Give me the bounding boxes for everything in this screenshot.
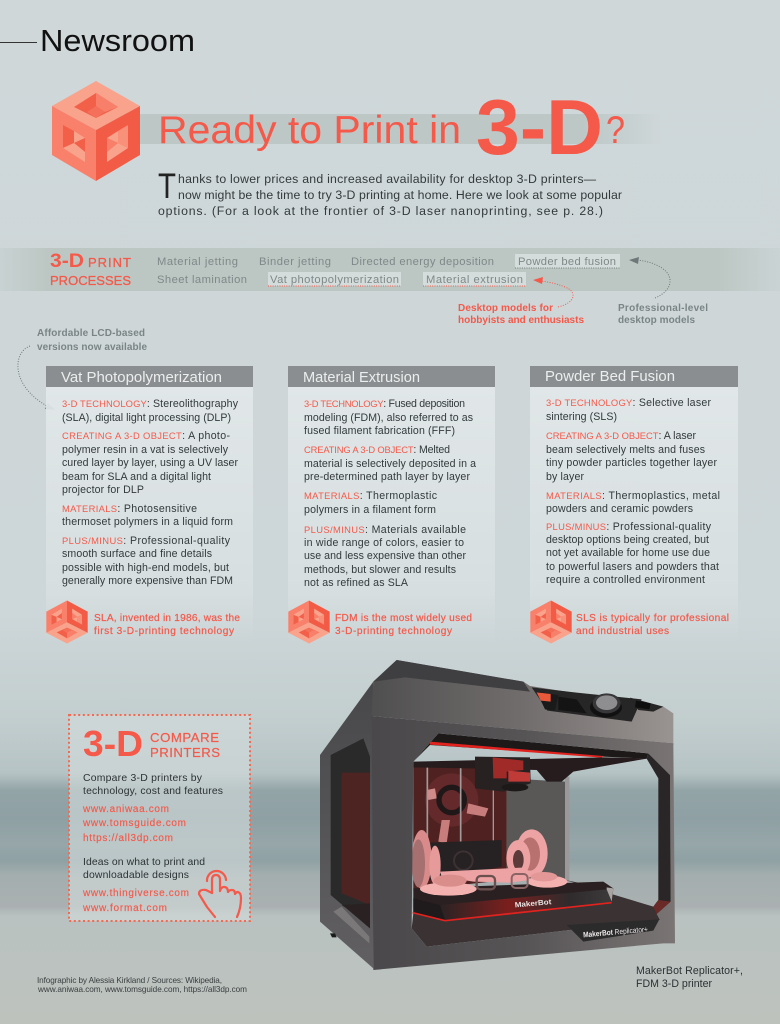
annotation: affordable LCD-based versions: versions now available — [37, 342, 147, 353]
panel text: require a controlled environment — [546, 574, 705, 586]
heading: 3-D compare printers: PRINTERS — [150, 745, 220, 760]
icon: cube logo — [52, 81, 140, 181]
panel text: powders and ceramic powders — [546, 503, 693, 515]
text: compare description: Compare 3-D printers by — [83, 773, 203, 784]
panel text — [304, 398, 476, 589]
callout: and industrial uses — [576, 626, 669, 637]
printer control panel — [532, 687, 663, 722]
process list — [157, 254, 620, 286]
heading: 3-D compare printers: COMPARE — [150, 730, 219, 745]
printer badge: MakerBot Replicator+ — [583, 925, 649, 939]
panel text: not as refined as SLA — [304, 577, 409, 589]
icon: small cube — [46, 600, 88, 644]
panel text: to powerful lasers and powders that — [546, 561, 719, 573]
links: design sites: www.format.com — [82, 903, 167, 914]
links: design sites — [82, 888, 189, 914]
panel text: not yet available for home use due — [546, 547, 710, 559]
annotation: desktop models for hobbyists: Desktop models for — [458, 303, 553, 314]
panel text: material is selectively deposited in a — [304, 458, 476, 470]
panel text: MATERIALS: Thermoplastic — [304, 490, 438, 502]
title — [158, 83, 625, 171]
icon: small cube — [530, 600, 572, 644]
panel text: PLUS/MINUS: Materials available — [304, 524, 466, 536]
annotation: affordable LCD-based versions: Affordable LCD-based — [37, 328, 145, 339]
printer floor and build plate — [412, 880, 660, 947]
icon: pointing hand — [199, 871, 241, 917]
panel text: CREATING A 3-D OBJECT: Melted — [304, 444, 450, 456]
panel text: (SLA), digital light processing (DLP) — [62, 412, 231, 424]
panel text: cured layer by layer, using a UV laser — [62, 457, 238, 469]
panel text: sintering (SLS) — [546, 411, 617, 423]
annotation: professional-level desktop models: desktop models — [618, 315, 695, 326]
section label: Newsroom: Newsroom — [40, 23, 195, 58]
panel: Vat Photopolymerization — [46, 366, 253, 644]
panel heading — [46, 366, 253, 387]
intro paragraph: hanks to lower prices and increased availability for desktop 3-D printers— — [178, 172, 597, 186]
panel text: fused filament fabrication (FFF) — [304, 425, 455, 437]
heading: 3-D compare printers — [83, 723, 220, 764]
panel text — [62, 398, 239, 587]
title: ? — [606, 109, 625, 152]
caption: printer — [636, 965, 743, 990]
panel: Powder Bed Fusion — [530, 366, 738, 644]
panel text: polymers in a filament form — [304, 504, 436, 516]
panel: Material Extrusion — [288, 366, 495, 644]
panel heading: Material Extrusion — [303, 370, 420, 386]
credits — [37, 976, 247, 994]
panel text: beam for SLA and a digital light — [62, 471, 211, 483]
annotation: professional-level desktop models — [618, 257, 708, 326]
callout: SLA, invented in 1986, was the — [94, 613, 240, 624]
annotation: professional-level desktop models: Professional-level — [618, 303, 708, 314]
credits: Infographic by Alessia Kirkland / Sources: Wikipedia, — [37, 976, 222, 985]
panel text: projector for DLP — [62, 484, 144, 496]
intro paragraph: options. (For a look at the frontier of 3-D laser nanoprinting, see p. 28.) — [158, 204, 603, 218]
panel text: CREATING A 3-D OBJECT: A photo- — [62, 430, 230, 442]
panel text: 3-D TECHNOLOGY: Fused deposition — [304, 398, 465, 410]
icon: small cube — [288, 600, 330, 644]
panel text: beam selectively melts and fuses — [546, 444, 705, 456]
text: compare description: technology, cost and features — [83, 786, 223, 797]
intro paragraph: now might be the time to try 3-D printing at home. Here we look at some popular — [178, 188, 622, 202]
title: Ready to Print in — [158, 109, 461, 152]
process list: Directed energy deposition — [351, 256, 494, 268]
panel text: 3-D TECHNOLOGY: Stereolithography — [62, 398, 239, 410]
panel text: methods, but slower and results — [304, 564, 456, 576]
callout — [576, 613, 729, 637]
links: comparison sites — [82, 804, 186, 844]
annotation: affordable LCD-based versions — [18, 328, 147, 410]
process list: Material jetting — [157, 256, 238, 268]
panel: compare printers — [69, 715, 250, 921]
panel text: thermoset polymers in a liquid form — [62, 516, 233, 528]
heading: 3-D print processes: 3-D — [50, 251, 84, 272]
heading: 3-D print processes: PROCESSES — [50, 273, 131, 288]
text: ideas description — [83, 857, 205, 881]
links: comparison sites: www.aniwaa.com — [82, 804, 169, 815]
printed parts — [412, 829, 567, 896]
panel text — [546, 397, 720, 586]
callout — [335, 613, 472, 637]
printer badge — [567, 919, 659, 942]
panel text: PLUS/MINUS: Professional-quality — [62, 535, 231, 547]
panel text: use and less expensive than other — [304, 550, 466, 562]
panel text: tiny powder particles together layer — [546, 457, 717, 469]
heading: 3-D print processes — [50, 251, 131, 288]
caption: printer: FDM 3-D printer — [636, 978, 712, 990]
panel text: PLUS/MINUS: Professional-quality — [546, 521, 712, 533]
process list: Powder bed fusion — [518, 256, 616, 268]
panel text: pre-determined path layer by layer — [304, 471, 470, 483]
credits: www.aniwaa.com, www.tomsguide.com, https://all3dp.com — [37, 985, 247, 994]
panel text: generally more expensive than FDM — [62, 575, 233, 587]
text: compare description — [83, 773, 223, 797]
panel text: desktop options being created, but — [546, 534, 709, 546]
panel heading — [530, 366, 738, 387]
process list: Material extrusion — [426, 274, 523, 286]
links: comparison sites: www.tomsguide.com — [82, 818, 186, 829]
panel text: modeling (FDM), also referred to as — [304, 412, 473, 424]
intro paragraph: T — [158, 167, 176, 206]
process list: Sheet lamination — [157, 274, 247, 286]
panel text: MATERIALS: Thermoplastics, metal — [546, 490, 720, 502]
text: ideas description: downloadable designs — [83, 870, 189, 881]
printer interior — [413, 733, 648, 890]
printer floor and build plate: MakerBot — [514, 897, 552, 909]
panel text: smooth surface and fine details — [62, 548, 212, 560]
panel text: CREATING A 3-D OBJECT: A laser — [546, 430, 696, 442]
panel heading: Powder Bed Fusion — [545, 369, 675, 385]
links: design sites: www.thingiverse.com — [82, 888, 189, 899]
links: comparison sites: https://all3dp.com — [83, 833, 173, 844]
annotation: desktop models for hobbyists — [458, 277, 584, 326]
title: 3-D — [476, 83, 603, 171]
panel heading: Vat Photopolymerization — [61, 370, 222, 386]
title band — [138, 114, 660, 144]
image: MakerBot Replicator+ 3-D printer — [320, 660, 675, 970]
panel text: in wide range of colors, easier to — [304, 537, 464, 549]
callout: first 3-D-printing technology — [94, 626, 235, 637]
callout — [94, 613, 240, 637]
annotation: desktop models for hobbyists: hobbyists and enthusiasts — [458, 315, 584, 326]
printer left side — [320, 682, 373, 968]
panel heading — [288, 366, 495, 387]
intro paragraph — [158, 167, 622, 218]
callout: SLS is typically for professional — [576, 613, 729, 624]
panel text: by layer — [546, 471, 584, 483]
printer front frame — [372, 716, 675, 970]
heading: 3-D print processes: PRINT — [88, 255, 131, 270]
process list: Binder jetting — [259, 256, 331, 268]
printer top — [372, 660, 673, 744]
panel text: MATERIALS: Photosensitive — [62, 503, 197, 515]
callout: FDM is the most widely used — [335, 613, 472, 624]
callout: 3-D-printing technology — [335, 626, 453, 637]
panel text: possible with high-end models, but — [62, 562, 229, 574]
text: ideas description: Ideas on what to print and — [83, 857, 205, 868]
panel text: polymer resin in a vat is selectively — [62, 444, 229, 456]
panel: print processes band — [0, 248, 780, 291]
heading: 3-D compare printers: 3-D — [83, 723, 143, 764]
panel text: 3-D TECHNOLOGY: Selective laser — [546, 397, 711, 409]
process list: Vat photopolymerization — [270, 274, 399, 286]
caption: printer: MakerBot Replicator+, — [636, 965, 743, 977]
